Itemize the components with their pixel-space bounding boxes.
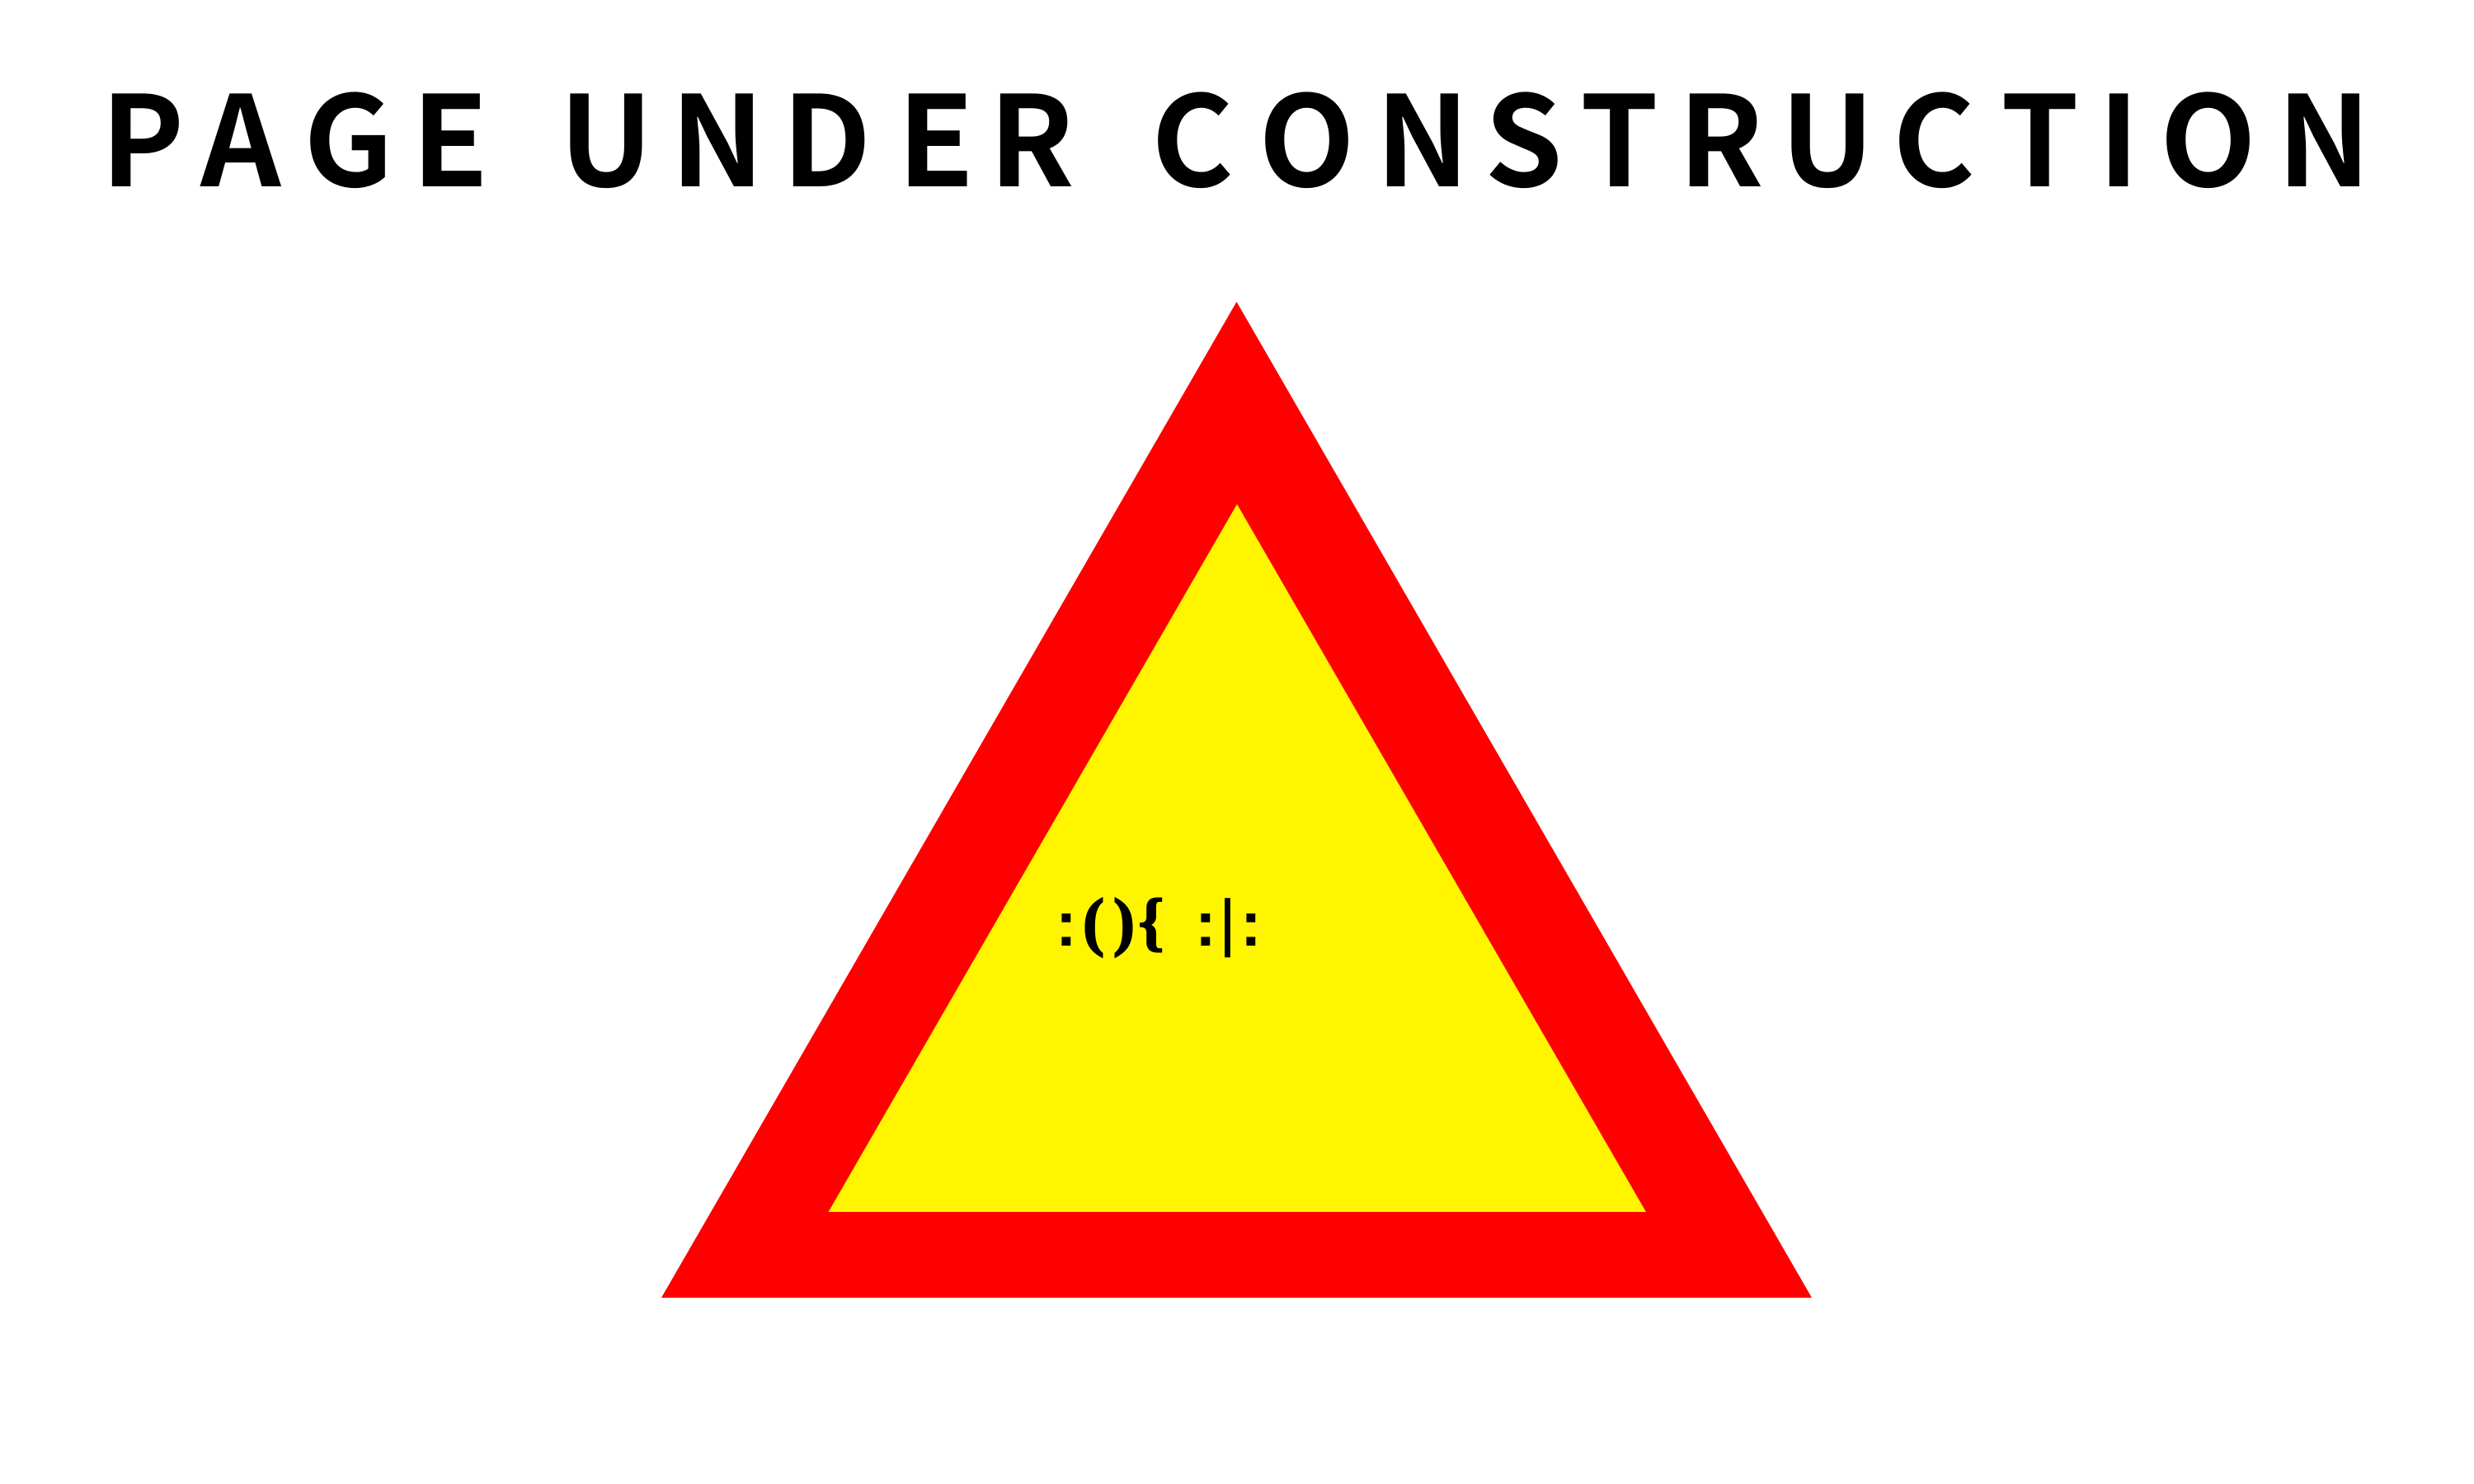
- fork bomb text in triangle: :: [1056, 889, 1077, 960]
- fork bomb text in triangle: :: [1175, 889, 1216, 960]
- fork bomb text in triangle: |: [1221, 886, 1235, 957]
- warning triangle: [661, 302, 1812, 1298]
- title: PAGE UNDER CONSTRUCTION: [101, 41, 2371, 223]
- fork bomb text in triangle: (){: [1083, 885, 1164, 957]
- triangle: yellow inner field: [828, 505, 1646, 1212]
- fork bomb text in triangle: :: [1240, 889, 1262, 960]
- triangle: red outer border: [661, 302, 1812, 1298]
